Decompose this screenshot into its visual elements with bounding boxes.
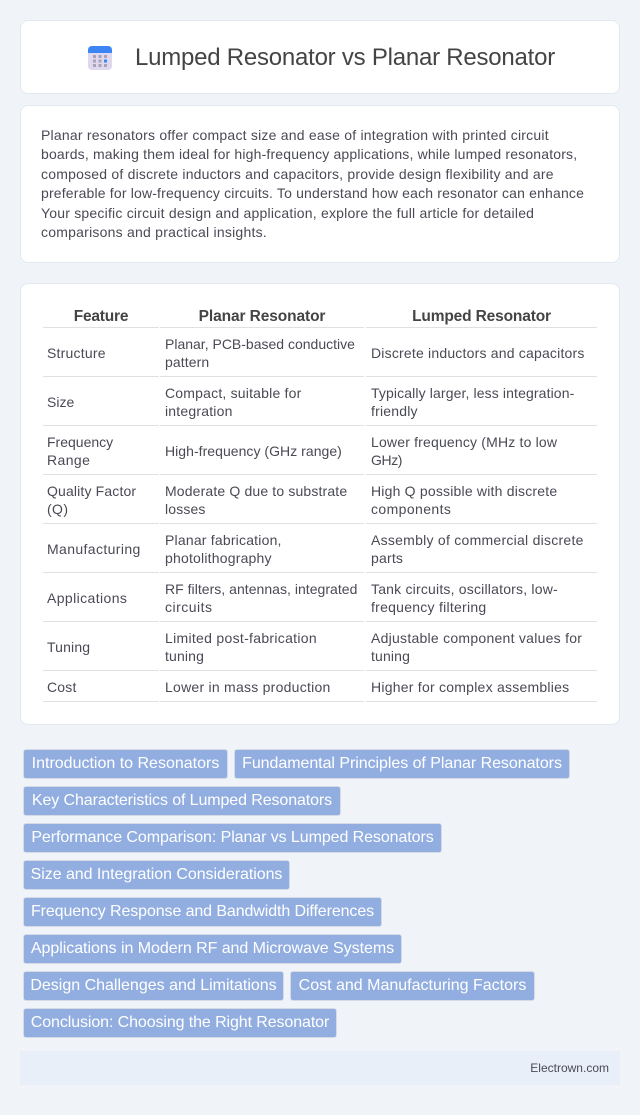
row: applications: frequency filtering — [371, 599, 486, 615]
tag: applications: Applications in Modern RF and Microwave Systems — [31, 940, 394, 957]
row: size: Size — [47, 394, 74, 410]
table header: Planar Resonator — [199, 308, 325, 325]
row: frequency range: GHz) — [371, 452, 402, 468]
row: quality factor: High Q possible with discrete — [371, 483, 557, 499]
row: applications — [43, 581, 597, 622]
row: quality factor: Moderate Q due to substrate — [165, 483, 347, 499]
table header — [43, 308, 597, 328]
row: cost: Higher for complex assemblies — [371, 679, 569, 695]
row: frequency range: Lower frequency (MHz to low — [371, 434, 557, 450]
intro paragraph: preferable for low-frequency circuits. To understand how each resonator can enhance — [41, 185, 584, 201]
row: tuning: Limited post-fabrication — [165, 630, 317, 646]
row: manufacturing: Manufacturing — [47, 541, 141, 557]
row: manufacturing: photolithography — [165, 550, 272, 566]
row: manufacturing — [43, 532, 597, 573]
tag: design challenges — [23, 971, 284, 1001]
tag: performance comparison — [23, 823, 442, 853]
tag: fundamental principles: Fundamental Principles of Planar Resonators — [242, 755, 562, 772]
tag: cost and manufacturing: Cost and Manufacturing Factors — [299, 977, 526, 994]
intro paragraph: Your specific circuit design and application, explore the full article for detailed — [41, 205, 534, 221]
row: quality factor — [43, 483, 597, 524]
tag: introduction: Introduction to Resonators — [32, 755, 219, 772]
row: size: Compact, suitable for — [165, 385, 301, 401]
row: tuning: Tuning — [47, 639, 90, 655]
row: tuning — [43, 630, 597, 671]
tag: key characteristics: Key Characteristics of Lumped Resonators — [32, 792, 332, 809]
icon: calendar — [88, 46, 112, 70]
row: cost: Cost — [47, 679, 77, 695]
row: tuning: Adjustable component values for — [371, 630, 582, 646]
row: frequency range: High-frequency (GHz range) — [165, 443, 342, 459]
title: Lumped Resonator vs Planar Resonator — [135, 44, 555, 71]
table header: Feature — [74, 308, 128, 325]
row: quality factor: components — [371, 501, 451, 517]
tag: conclusion — [23, 1008, 337, 1038]
row: manufacturing: Assembly of commercial discrete — [371, 532, 584, 548]
intro paragraph — [41, 127, 584, 240]
row: quality factor: losses — [165, 501, 206, 517]
row: tuning: tuning — [165, 648, 204, 664]
intro paragraph: Planar resonators offer compact size and ease of integration with printed circuit — [41, 127, 549, 143]
row: tuning: tuning — [371, 648, 410, 664]
row: structure: Structure — [47, 345, 106, 361]
tag: performance comparison: Performance Comparison: Planar vs Lumped Resonators — [31, 829, 434, 846]
row: structure: pattern — [165, 354, 209, 370]
row: manufacturing: Planar fabrication, — [165, 532, 282, 548]
panel: comparison table — [20, 283, 620, 725]
tag: key characteristics — [23, 786, 341, 816]
table header: Lumped Resonator — [412, 308, 551, 325]
intro paragraph: comparisons and practical insights. — [41, 224, 267, 240]
tag: size and integration: Size and Integration Considerations — [31, 866, 282, 883]
row: applications: circuits — [165, 599, 213, 615]
row: frequency range: Frequency — [47, 434, 113, 450]
tag: fundamental principles — [234, 749, 570, 779]
row: applications: RF filters, antennas, integrated — [165, 581, 357, 597]
tag: applications — [23, 934, 402, 964]
row: quality factor: Quality Factor — [47, 483, 136, 499]
tag: size and integration — [23, 860, 290, 890]
row: size: Typically larger, less integration- — [371, 385, 574, 401]
topic tags — [23, 749, 570, 1038]
row: structure — [43, 336, 597, 377]
row: size: integration — [165, 403, 233, 419]
tag: frequency response: Frequency Response and Bandwidth Differences — [31, 903, 374, 920]
row: applications: Applications — [47, 590, 127, 606]
tag: frequency response — [23, 897, 382, 927]
row: frequency range — [43, 434, 597, 475]
header panel — [20, 20, 620, 94]
row: size: friendly — [371, 403, 418, 419]
intro paragraph: composed of discrete inductors and capacitors, provide design flexibility and are — [41, 166, 554, 182]
intro paragraph: boards, making them ideal for high-frequency applications, while lumped resonators, — [41, 146, 577, 162]
row: cost: Lower in mass production — [165, 679, 331, 695]
row: manufacturing: parts — [371, 550, 403, 566]
footer bar — [20, 1051, 620, 1085]
row: structure: Planar, PCB-based conductive — [165, 336, 355, 352]
footer credit: Electrown.com — [530, 1061, 609, 1075]
row: size — [43, 385, 597, 426]
row: applications: Tank circuits, oscillators, low- — [371, 581, 558, 597]
row: quality factor: (Q) — [47, 501, 68, 517]
tag: design challenges: Design Challenges and Limitations — [30, 977, 277, 994]
row: frequency range: Range — [47, 452, 90, 468]
tag: introduction — [23, 749, 228, 779]
row: structure: Discrete inductors and capacitors — [371, 345, 585, 361]
row: cost — [43, 679, 597, 702]
tag: cost and manufacturing — [290, 971, 535, 1001]
panel: intro text — [20, 105, 620, 263]
tag: conclusion: Conclusion: Choosing the Right Resonator — [31, 1014, 329, 1031]
